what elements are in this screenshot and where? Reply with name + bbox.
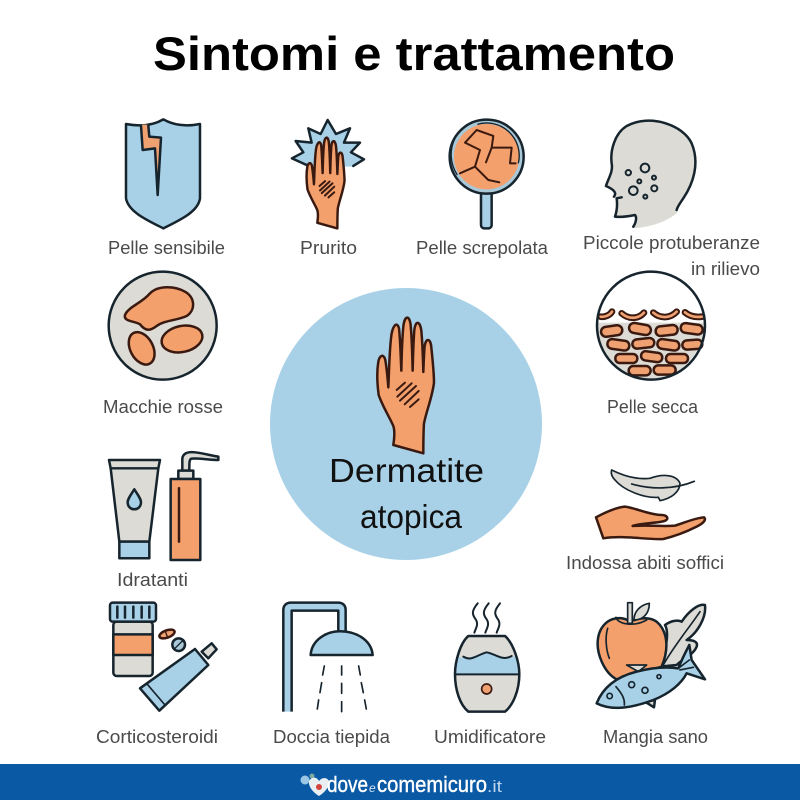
label: Pelle secca: [607, 397, 699, 417]
panel: idratanti: [109, 452, 218, 590]
icon: red patches: [109, 272, 217, 380]
label: Prurito: [300, 238, 357, 258]
label: [583, 233, 760, 279]
icon: cracked shield: [126, 119, 200, 228]
panel: pelle secca: [597, 272, 705, 417]
label: Doccia tiepida: [273, 727, 391, 747]
label: Piccole protuberanze: [583, 233, 760, 253]
text: Dermatite atopica: atopica: [360, 498, 463, 535]
title: Sintomi e trattamento: [153, 27, 675, 80]
label: Idratanti: [117, 570, 188, 590]
label: Indossa abiti soffici: [566, 553, 724, 573]
icon: humidifier: [455, 603, 519, 712]
panel: corticosteroidi: [96, 603, 218, 747]
panel: prurito: [292, 120, 364, 258]
logo wordmark: e: [369, 781, 376, 795]
icon: head with bumps: [606, 121, 695, 228]
icon: shower: [283, 603, 373, 712]
crescent flakes: [601, 312, 702, 318]
panel: pelle screpolata: [416, 120, 549, 258]
label: Corticosteroidi: [96, 727, 218, 747]
label: in rilievo: [691, 259, 760, 279]
panel: piccole protuberanze: [583, 121, 760, 279]
panel: doccia tiepida: [273, 603, 391, 747]
icon: itchy hand: [292, 120, 364, 228]
icon: logo heart: [300, 774, 329, 796]
panel: mangia sano: [597, 603, 708, 747]
logo wordmark: dove: [327, 772, 368, 797]
icon: magnifier on cracked skin: [450, 120, 524, 228]
logo wordmark: [327, 772, 502, 797]
central panel: Dermatite atopica: [270, 288, 542, 560]
icon: feather over hand: [596, 470, 705, 539]
label: Mangia sano: [603, 727, 708, 747]
icon: central hand: [377, 318, 434, 453]
text: Dermatite atopica: Dermatite: [329, 452, 484, 489]
panel: pelle sensibile: [108, 119, 225, 258]
icon: dry skin cross section: [597, 272, 705, 380]
icon: apple, greens and fish: [597, 603, 705, 708]
footer band: [0, 764, 800, 800]
text: Dermatite atopica: [329, 452, 484, 535]
logo wordmark: .it: [487, 777, 502, 796]
label: Macchie rosse: [103, 397, 223, 417]
panel: indossa abiti soffici: [566, 470, 724, 573]
panel: umidificatore: [434, 603, 546, 747]
icon: tube and pump bottle: [109, 452, 218, 560]
icon: pills and cream: [110, 603, 217, 711]
label: Umidificatore: [434, 727, 546, 747]
label: Pelle screpolata: [416, 238, 549, 258]
panel: macchie rosse: [103, 272, 223, 417]
label: Pelle sensibile: [108, 238, 225, 258]
logo wordmark: comemicuro: [377, 772, 487, 797]
